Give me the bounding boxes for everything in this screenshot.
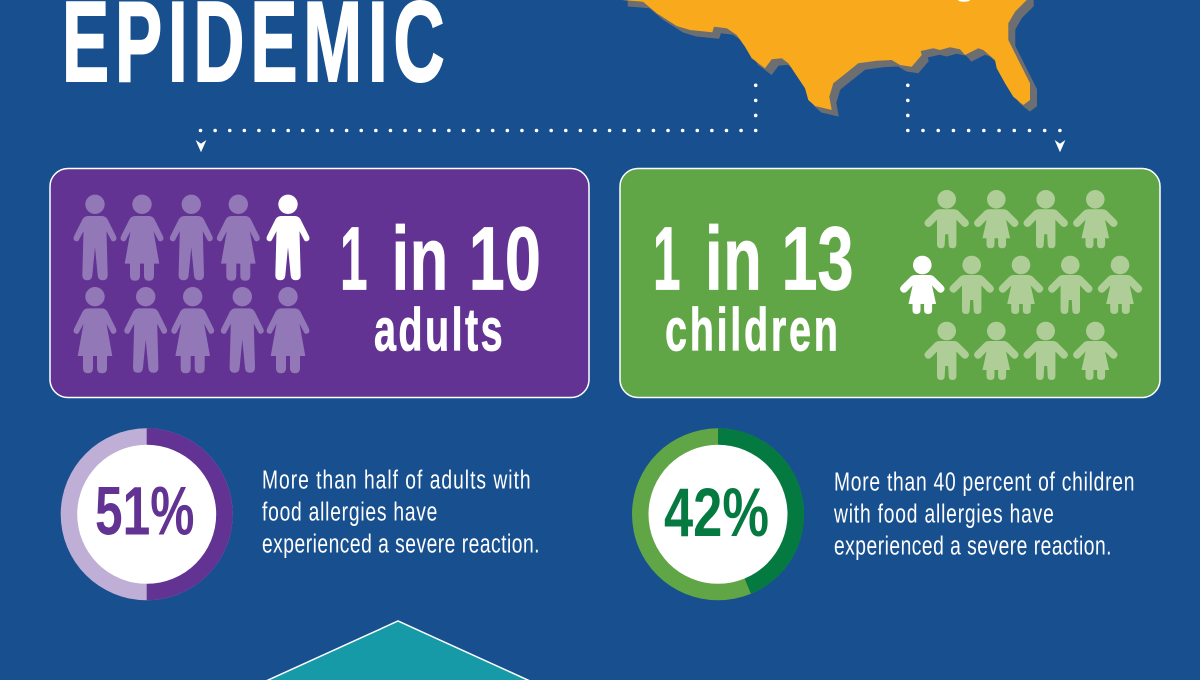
- adult pictogram: [74, 195, 309, 373]
- children statistic: 1: [653, 209, 681, 309]
- map marker: [958, 0, 970, 2]
- map land: [622, 0, 1030, 110]
- children pictogram: [900, 190, 1142, 380]
- text block: children severe reaction: experienced a severe reaction.: [834, 531, 1112, 560]
- adult percentage: 51%: [95, 472, 194, 549]
- text block: children severe reaction: More than 40 percent of children: [834, 467, 1134, 496]
- adult label: adults: [374, 296, 503, 364]
- child percentage: 42%: [664, 474, 769, 551]
- children statistic: [653, 208, 854, 309]
- map of the United States: [622, 0, 1036, 116]
- text block: adults severe reaction: More than half of adults with: [262, 464, 531, 494]
- arrow: map to children panel: [908, 85, 1065, 152]
- text block: adults severe reaction: experienced a severe reaction.: [262, 529, 540, 558]
- adult statistic: 10: [469, 208, 541, 309]
- children label: children: [665, 296, 838, 364]
- adult statistic: 1: [340, 209, 368, 309]
- children statistic: 13: [782, 208, 854, 309]
- text block: adults severe reaction: [262, 464, 540, 558]
- panel: children: [620, 168, 1160, 398]
- panel: adults: [50, 168, 589, 398]
- panel: teal house shape: [266, 621, 530, 680]
- text block: children severe reaction: [833, 467, 1134, 560]
- adult statistic: [340, 208, 541, 309]
- donut chart: adults 51%: [61, 428, 233, 600]
- adult statistic: in: [392, 210, 449, 309]
- text block: adults severe reaction: food allergies have: [262, 497, 437, 526]
- map shadow: [628, 0, 1036, 116]
- arrow: map to adults panel: [196, 85, 756, 152]
- text block: children severe reaction: with food allergies have: [833, 499, 1054, 528]
- children statistic: in: [705, 210, 762, 309]
- donut chart: children 42%: [632, 428, 804, 600]
